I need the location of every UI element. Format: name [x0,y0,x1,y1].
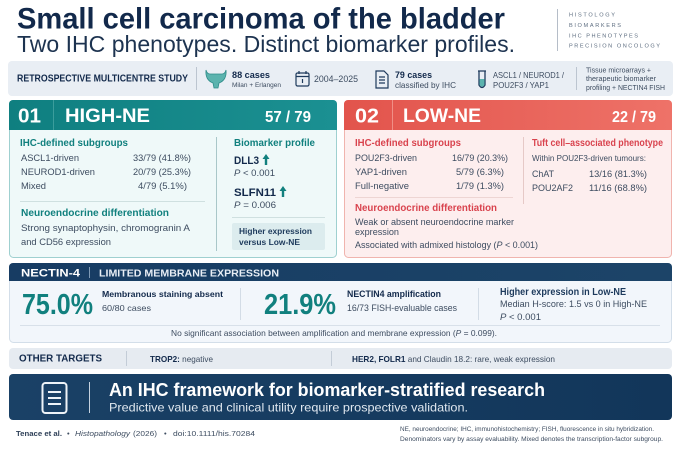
classified cases: 79 cases [395,70,432,81]
panel: other targets: HER2, FOLR1 and Claudin 18.2: rare, weak expression [352,354,555,364]
neuroendocrine differentiation: Weak or absent neuroendocrine marker [355,217,514,228]
subgroups: 20/79 (25.3%) [133,167,191,178]
abbreviations note: NE, neuroendocrine; IHC, immunohistochemistry; FISH, fluorescence in situ hybridization. [400,426,654,433]
panel: other targets: OTHER TARGETS [19,354,102,364]
subgroups: 4/79 (5.1%) [138,181,187,192]
neuroendocrine differentiation: Neuroendocrine differentiation [355,203,497,214]
subgroups: POU2F3-driven [355,153,417,164]
title: Small cell carcinoma of the bladder [17,2,505,36]
topic tags: IHC PHENOTYPES [569,34,638,40]
tuft cell phenotype: 11/16 (68.8%) [589,183,647,194]
classified cases [395,70,456,90]
topic tags: PRECISION ONCOLOGY [569,44,660,50]
subgroups: 1/79 (1.3%) [456,181,504,192]
biomarker profile: P = 0.006 [234,200,276,211]
subgroups: YAP1-driven [355,167,407,178]
stat: membranous staining absent: Membranous staining absent [102,289,223,299]
methods: Tissue microarrays + [586,68,651,74]
subgroups [20,138,191,192]
higher expression in Low-NE: Median H-score: 1.5 vs 0 in High-NE [500,299,647,310]
methods [586,68,665,92]
banner [9,374,672,420]
cases [232,70,281,89]
icon: calendar [296,71,309,86]
cases: 88 cases [232,70,270,81]
higher expression in Low-NE: P < 0.001 [500,312,541,323]
subgroups: Mixed [21,181,46,192]
header: Nectin-4 [9,263,672,281]
tuft cell phenotype [532,138,663,194]
association note: No significant association between amplification and membrane expression ( P = 0.099). [171,328,497,338]
topic tags: BIOMARKERS [569,23,621,29]
markers: ASCL1 / NEUROD1 / [493,70,565,80]
biomarker profile: SLFN11 [234,187,276,199]
subgroups: IHC-defined subgroups [355,138,461,149]
stat: amplification: 16/73 FISH-evaluable cases [347,303,457,313]
tuft cell phenotype: Within POU2F3-driven tumours: [532,154,646,163]
citation: • [67,429,70,438]
callout: Higher expression [239,226,312,236]
callout [232,223,325,250]
higher expression in Low-NE: Higher expression in Low-NE [500,287,626,298]
header: Low-NE: LOW-NE [403,106,481,127]
panel: Low-NE [344,100,672,258]
panel: Nectin-4 [9,263,672,342]
topic tags: HISTOLOGY [569,12,615,18]
biomarker profile: P < 0.001 [234,168,275,179]
header: High-NE: 01 [18,106,41,128]
methods: therapeutic biomarker [586,76,657,83]
subgroups: Full-negative [355,181,409,192]
tuft cell phenotype: POU2AF2 [532,183,573,194]
neuroendocrine differentiation [21,208,191,248]
subgroups [355,138,508,192]
subgroups: 33/79 (41.8%) [133,153,191,164]
icon: document [376,71,388,88]
neuroendocrine differentiation: expression [355,227,399,238]
panel: other targets: TROP2: negative [150,354,213,364]
years: 2004–2025 [314,74,358,84]
header: High-NE [9,100,337,130]
neuroendocrine differentiation: Neuroendocrine differentiation [21,208,169,219]
icon: arrow up [262,154,270,165]
citation [16,429,255,438]
neuroendocrine differentiation: and CD56 expression [21,237,111,248]
subgroups: NEUROD1-driven [21,167,95,178]
classified cases: classified by IHC [395,81,456,90]
stat: amplification [264,289,457,321]
tuft cell phenotype: Tuft cell–associated phenotype [532,138,663,149]
icon: document [42,383,66,413]
citation: • [164,429,167,438]
subgroups: ASCL1-driven [21,153,79,164]
header: Low-NE: 22 / 79 [612,109,656,126]
icon: arrow up [280,186,286,197]
biomarker profile [234,138,315,211]
topic tags [557,9,660,51]
panel: other targets [9,348,672,369]
citation: (2026) [133,429,158,438]
banner subheading: Predictive value and clinical utility require prospective validation. [109,400,468,414]
stat: membranous staining absent [22,289,223,321]
tuft cell phenotype: ChAT [532,169,554,180]
neuroendocrine differentiation: Associated with admixed histology (P < 0.001) [355,240,538,251]
markers [493,70,565,90]
header: Low-NE [344,100,672,130]
markers: POU2F3 / YAP1 [493,80,549,90]
citation: Tenace et al. [16,429,62,438]
header: Low-NE: 02 [355,106,379,128]
subtitle: Two IHC phenotypes. Distinct biomarker profiles. [17,31,515,57]
study strip [8,61,673,96]
stat: membranous staining absent: 75.0% [22,289,93,321]
abbreviations note: Denominators vary by assay evaluability. Mixed denotes the transcription-factor subgroup. [400,436,663,443]
methods: profiling + NECTIN4 FISH [586,85,665,92]
subgroups: 5/79 (6.3%) [456,167,504,178]
panel: High-NE [9,100,337,258]
header: High-NE: 57 / 79 [265,109,311,126]
subgroups: IHC-defined subgroups [20,138,128,149]
neuroendocrine differentiation: Strong synaptophysin, chromogranin A [21,223,191,234]
stat: amplification: 21.9% [264,289,336,321]
subgroups: 16/79 (20.3%) [452,153,508,164]
cases: Milan + Erlangen [232,82,281,89]
header: Nectin-4: LIMITED MEMBRANE EXPRESSION [99,268,279,280]
citation: doi:10.1111/his.70284 [173,429,255,438]
abbreviations note [400,426,663,443]
study heading: RETROSPECTIVE MULTICENTRE STUDY [17,72,188,84]
citation: Histopathology [75,429,131,438]
banner heading: An IHC framework for biomarker-stratified research [109,380,545,400]
header: Nectin-4: NECTIN-4 [21,268,81,280]
icon: bladder [206,70,226,88]
icon: test tube [478,71,486,88]
callout: versus Low-NE [239,237,300,247]
higher expression in Low-NE [500,287,647,323]
biomarker profile: Biomarker profile [234,138,315,149]
biomarker profile: DLL3 [234,155,259,167]
stat: membranous staining absent: 60/80 cases [102,303,151,313]
neuroendocrine differentiation [355,203,538,251]
stat: amplification: NECTIN4 amplification [347,289,441,299]
tuft cell phenotype: 13/16 (81.3%) [589,169,647,180]
header: High-NE: HIGH-NE [65,106,150,127]
